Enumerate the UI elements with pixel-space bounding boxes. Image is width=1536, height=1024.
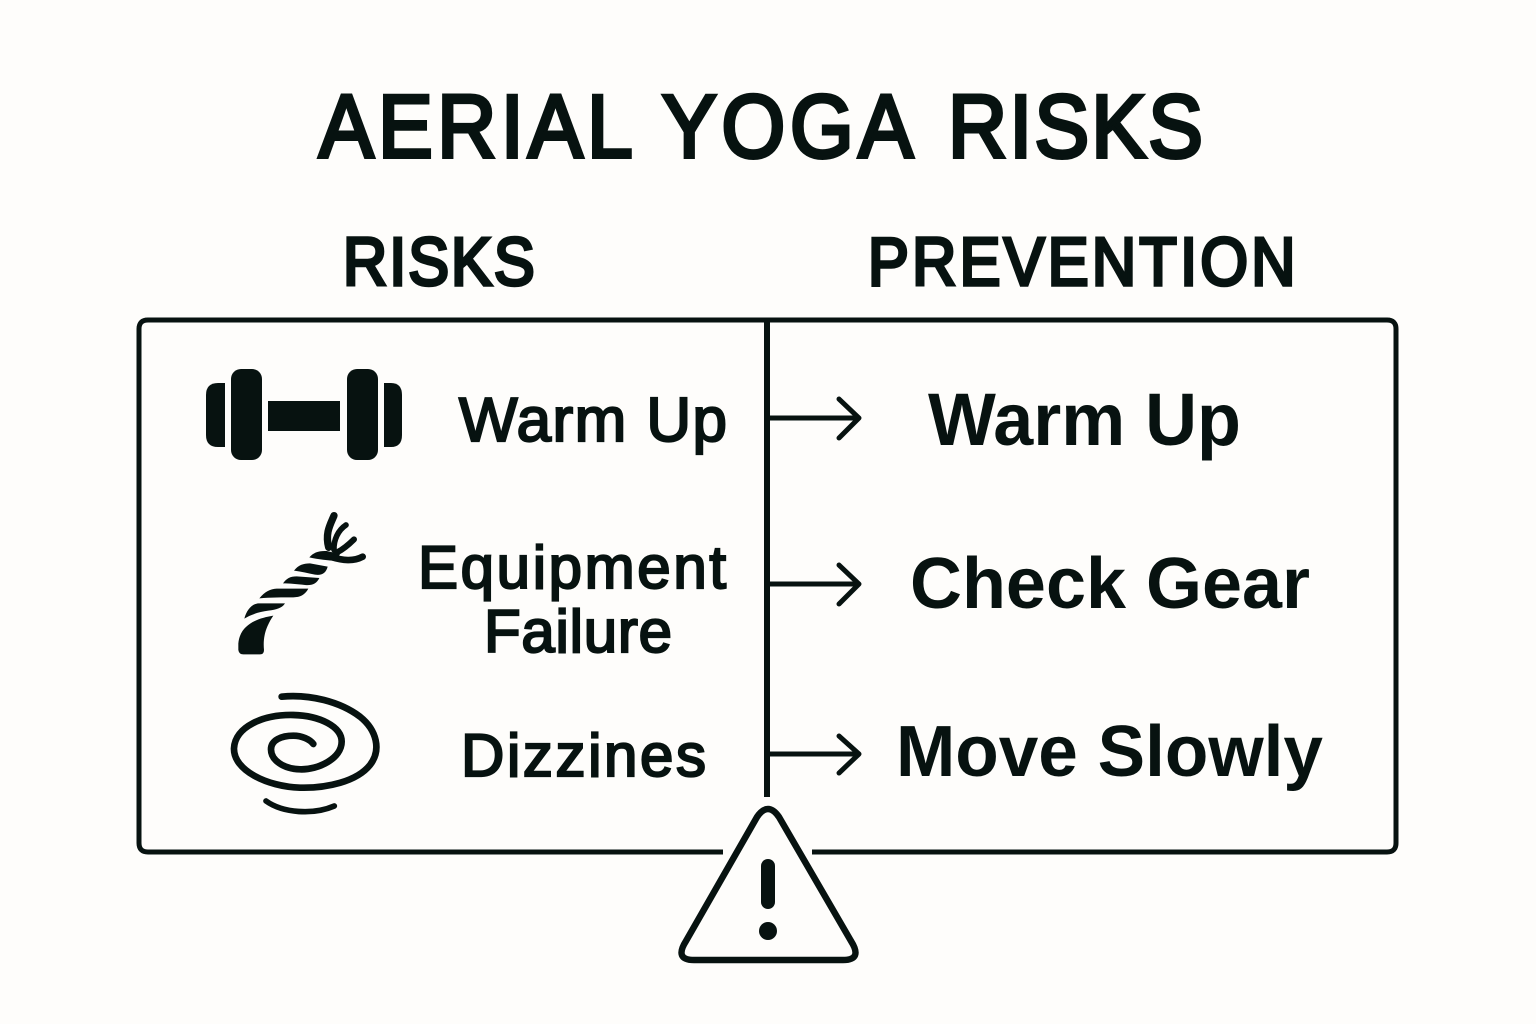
icon: dizziness spiral	[234, 696, 376, 812]
heading: prevention: PREVENTION	[868, 223, 1296, 300]
panel border	[139, 320, 1396, 852]
title	[319, 78, 1203, 177]
text: check gear prevention: Check Gear	[910, 544, 1310, 624]
title: YOGA	[662, 78, 913, 177]
title: AERIAL	[319, 78, 633, 177]
arrow: move slowly	[770, 736, 859, 773]
text: move slowly prevention: Move Slowly	[896, 712, 1323, 792]
text: equipment failure risk: Failure	[484, 598, 672, 665]
icon: warning triangle	[682, 809, 856, 960]
heading: risks: RISKS	[343, 223, 535, 300]
icon: frayed rope	[238, 516, 363, 654]
text: warm up risk: Warm Up	[459, 386, 727, 455]
panel: risks and prevention table	[139, 320, 1396, 852]
icon: dumbbell	[206, 369, 402, 460]
arrow: warm up	[770, 399, 859, 438]
centre divider	[764, 320, 770, 797]
title: RISKS	[948, 78, 1203, 177]
text: equipment failure risk: Equipment	[418, 534, 726, 601]
text: equipment failure risk	[418, 534, 726, 665]
text: dizziness risk: Dizzines	[461, 722, 706, 789]
arrow: check gear	[770, 565, 859, 604]
text: warm up prevention: Warm Up	[928, 378, 1241, 461]
